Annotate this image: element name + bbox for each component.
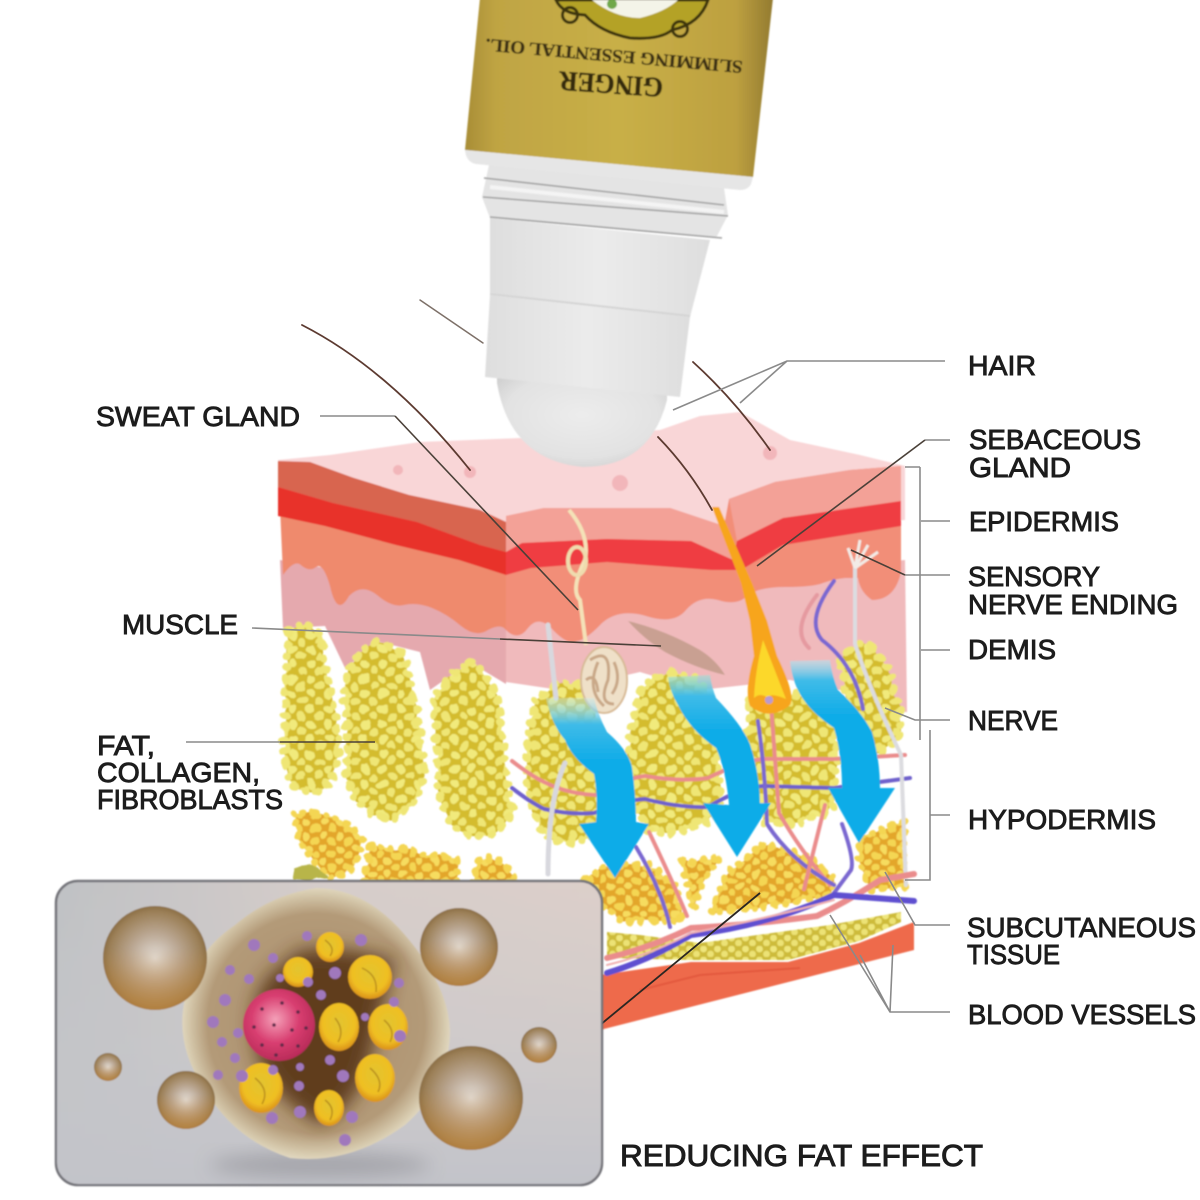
label: nerve: NERVE [968,705,1058,736]
bottle label: product name: GINGER [557,64,664,103]
label: fat, collagen, fibroblasts: FAT, [97,730,155,761]
label: hair: HAIR [968,350,1036,381]
caption: reducing fat effect: REDUCING FAT EFFECT [620,1138,983,1173]
label: sensory nerve ending: NERVE ENDING [968,589,1178,620]
bubbles [94,906,557,1150]
label: sweat gland: SWEAT GLAND [96,401,300,432]
roller housing [485,295,690,397]
label: sebaceous gland [969,424,1141,483]
fat cell body [182,888,450,1159]
label: blood vessels: BLOOD VESSELS [968,999,1196,1030]
label: fat, collagen, fibroblasts [97,730,283,815]
yellow subcutaneous strip [607,912,901,960]
bottle gold tube [465,0,773,177]
follicle pores [393,446,777,491]
bottom subcutaneous layer [600,922,914,1030]
label: fat, collagen, fibroblasts: COLLAGEN, [97,757,260,788]
muscle [628,621,725,675]
blue arrow 3 [790,660,895,843]
epidermis left face [278,461,506,633]
hairs [302,300,770,510]
label: demis: DEMIS [968,634,1056,665]
purple particles [207,931,406,1146]
label: sensory nerve ending: SENSORY [968,561,1100,592]
blood vessels and nerves [512,568,914,973]
labels [96,350,1196,1173]
nucleus [243,989,315,1061]
label: fat, collagen, fibroblasts: FIBROBLASTS [97,784,283,815]
label: muscle: MUSCLE [122,609,238,640]
bottle thread [482,165,728,238]
bottle label: subtitle: SLIMMING ESSENTIAL OIL. [485,35,743,77]
gold ornament [556,0,708,38]
sweat gland [568,510,627,713]
label: hypodermis: HYPODERMIS [968,804,1156,835]
inset background [56,881,602,1185]
label: sensory nerve ending [968,561,1178,620]
roller ball [497,372,667,467]
yellow lipid droplets [239,932,408,1126]
fat clusters [284,625,905,922]
panel: fat cell inset [56,881,602,1185]
bottle white lip [465,150,753,190]
hair follicle [712,507,791,714]
dermis layer [280,560,907,712]
roller bottle [465,0,773,467]
label: sebaceous gland: SEBACEOUS [969,424,1141,455]
roller collar [490,218,710,317]
skin cross-section diagram [278,412,914,1030]
blue arrow 1 [546,698,649,878]
label: sebaceous gland: GLAND [969,452,1071,483]
label: epidermis: EPIDERMIS [969,506,1119,537]
cell dark core [254,949,395,1125]
pointer to fat cell [600,893,760,1025]
label: subcutaneous tissue: TISSUE [967,939,1060,970]
leader lines [186,361,950,1012]
sensory nerve ending [848,540,878,568]
label: subcutaneous tissue: SUBCUTANEOUS [967,912,1196,943]
epidermis right face [506,466,901,642]
skin top surface [278,412,905,560]
label: subcutaneous tissue [967,912,1196,970]
blue arrow 2 [668,675,771,857]
cell shadow [210,1153,430,1177]
